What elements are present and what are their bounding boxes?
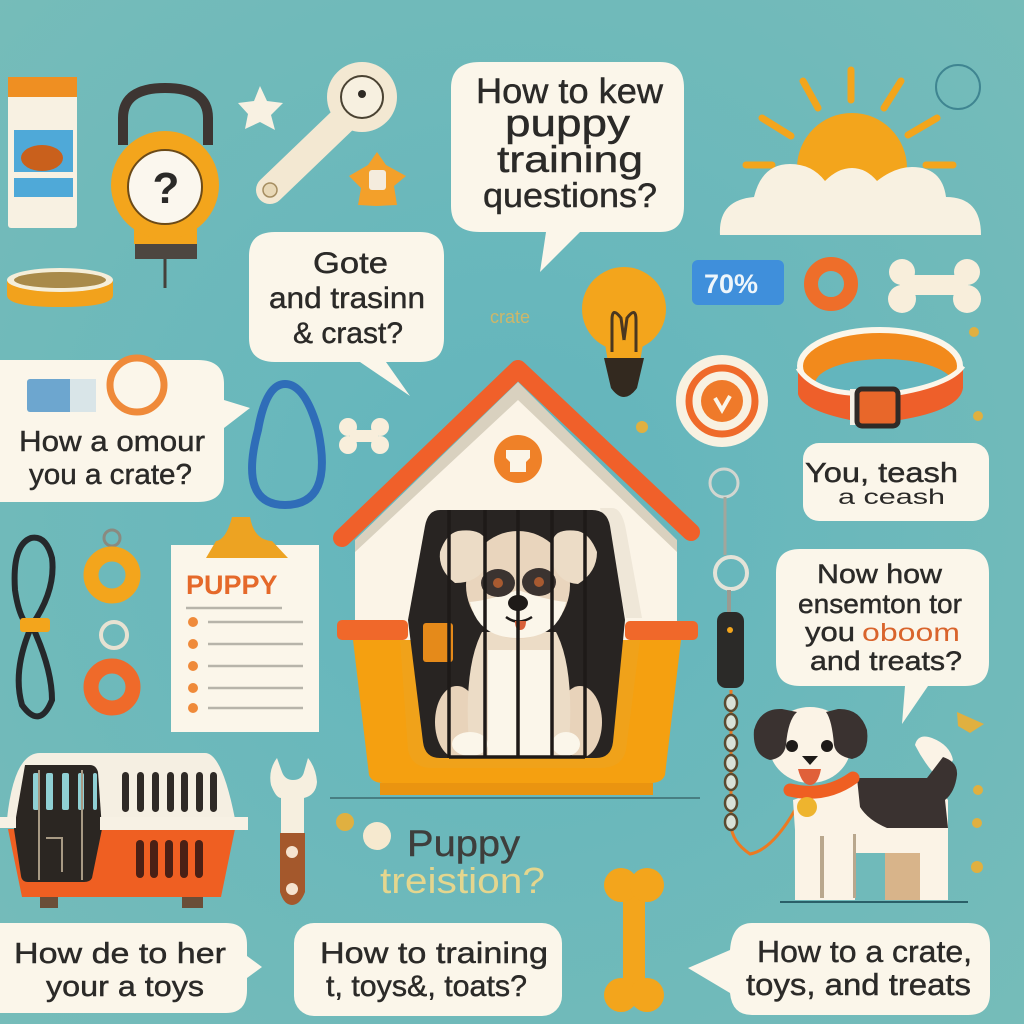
speech bubble: you teash: You, teash [805, 457, 958, 488]
speech bubble: how to training: How to training [320, 937, 548, 970]
crate bars [449, 510, 585, 758]
speech bubble: how a omour: How a omour [19, 426, 205, 458]
icon: black loop leash [15, 538, 53, 716]
icon: sun behind cloud [720, 65, 981, 235]
speech bubble: crate question: Gote [313, 247, 388, 280]
icon: leash clip chain [710, 469, 795, 854]
speech bubble: how to kew: How to kew [476, 72, 664, 111]
speech bubble: now how: Now how [817, 559, 943, 589]
speech bubble: how to kew: puppy [505, 103, 630, 145]
icon: light bulb [582, 267, 666, 397]
icon: orange ring [811, 264, 851, 304]
speech bubble: how a omour [0, 360, 250, 502]
house body [355, 386, 677, 640]
speech bubble: crate question: & crast? [293, 317, 403, 350]
icon: orange collar [798, 330, 963, 426]
text: puppy treistion: treistion? [380, 860, 545, 901]
icon: orange badge [349, 152, 406, 206]
icon: target badge [676, 355, 768, 447]
speech bubble: you teash [803, 443, 989, 521]
decorative gold specks [636, 327, 984, 873]
icon: wrench [263, 62, 397, 197]
speech bubble: how to kew: questions? [483, 177, 657, 215]
speech bubble: how to training [294, 923, 562, 1016]
speech bubble: how do to her [0, 923, 262, 1013]
icon: bone [888, 259, 981, 313]
icon: food bowl [7, 268, 113, 307]
icon: padlock with question mark [111, 88, 219, 288]
tag: 70%: 70% [704, 269, 758, 299]
small crate text: crate [490, 307, 530, 327]
clipboard: puppy checklist: PUPPY [186, 570, 278, 600]
speech bubble: how to a crate: toys, and treats [746, 967, 971, 1002]
speech bubble: how to a crate [688, 923, 990, 1015]
icon: small white bone [339, 418, 389, 454]
icon: key rings [91, 530, 133, 708]
speech bubble: how to kew: training [497, 139, 643, 180]
icon: padlock with question mark: ? [153, 164, 179, 213]
speech bubble: how do to her: How de to her [14, 938, 226, 970]
orange latch [423, 623, 453, 662]
icon: spanner tool [270, 758, 317, 905]
tag: 70% [692, 260, 784, 305]
speech bubble: now how [776, 549, 989, 724]
speech bubble: how to kew [451, 62, 684, 272]
speech bubble: how do to her: your a toys [46, 971, 204, 1003]
speech bubble: crate question [249, 232, 444, 396]
text: puppy treistion: Puppy [407, 823, 521, 864]
icon: blue block and orange ring in bubble [27, 358, 164, 412]
speech bubble: now how: oboom [862, 619, 960, 647]
speech bubble: crate question: and trasinn [269, 282, 425, 315]
speech bubble: now how: ensemton tor [798, 589, 962, 619]
ground shadow [330, 797, 700, 799]
icon: treat box [8, 77, 77, 228]
icon: standing dog [754, 707, 968, 902]
door panel [600, 508, 642, 618]
house emblem [494, 435, 542, 483]
icon: orange bone [604, 868, 664, 1012]
speech bubble: how to training: t, toys&, toats? [326, 970, 527, 1003]
speech bubble: how to a crate: How to a crate, [757, 934, 972, 969]
crate base [353, 640, 681, 783]
speech bubble: now how: you [805, 617, 855, 647]
clipboard: puppy checklist [171, 517, 319, 732]
roof [342, 369, 691, 538]
puppy [435, 530, 602, 758]
text: puppy treistion [336, 813, 545, 901]
speech bubble: now how: and treats? [810, 646, 962, 676]
speech bubble: you teash: a ceash [838, 486, 945, 509]
speech bubble: how a omour: you a crate? [29, 459, 192, 491]
central dog house [330, 369, 700, 798]
crate dark opening [408, 510, 625, 758]
icon: blue leash loop [252, 384, 322, 505]
icon: pet carrier [0, 753, 248, 908]
icon: star [238, 86, 283, 130]
